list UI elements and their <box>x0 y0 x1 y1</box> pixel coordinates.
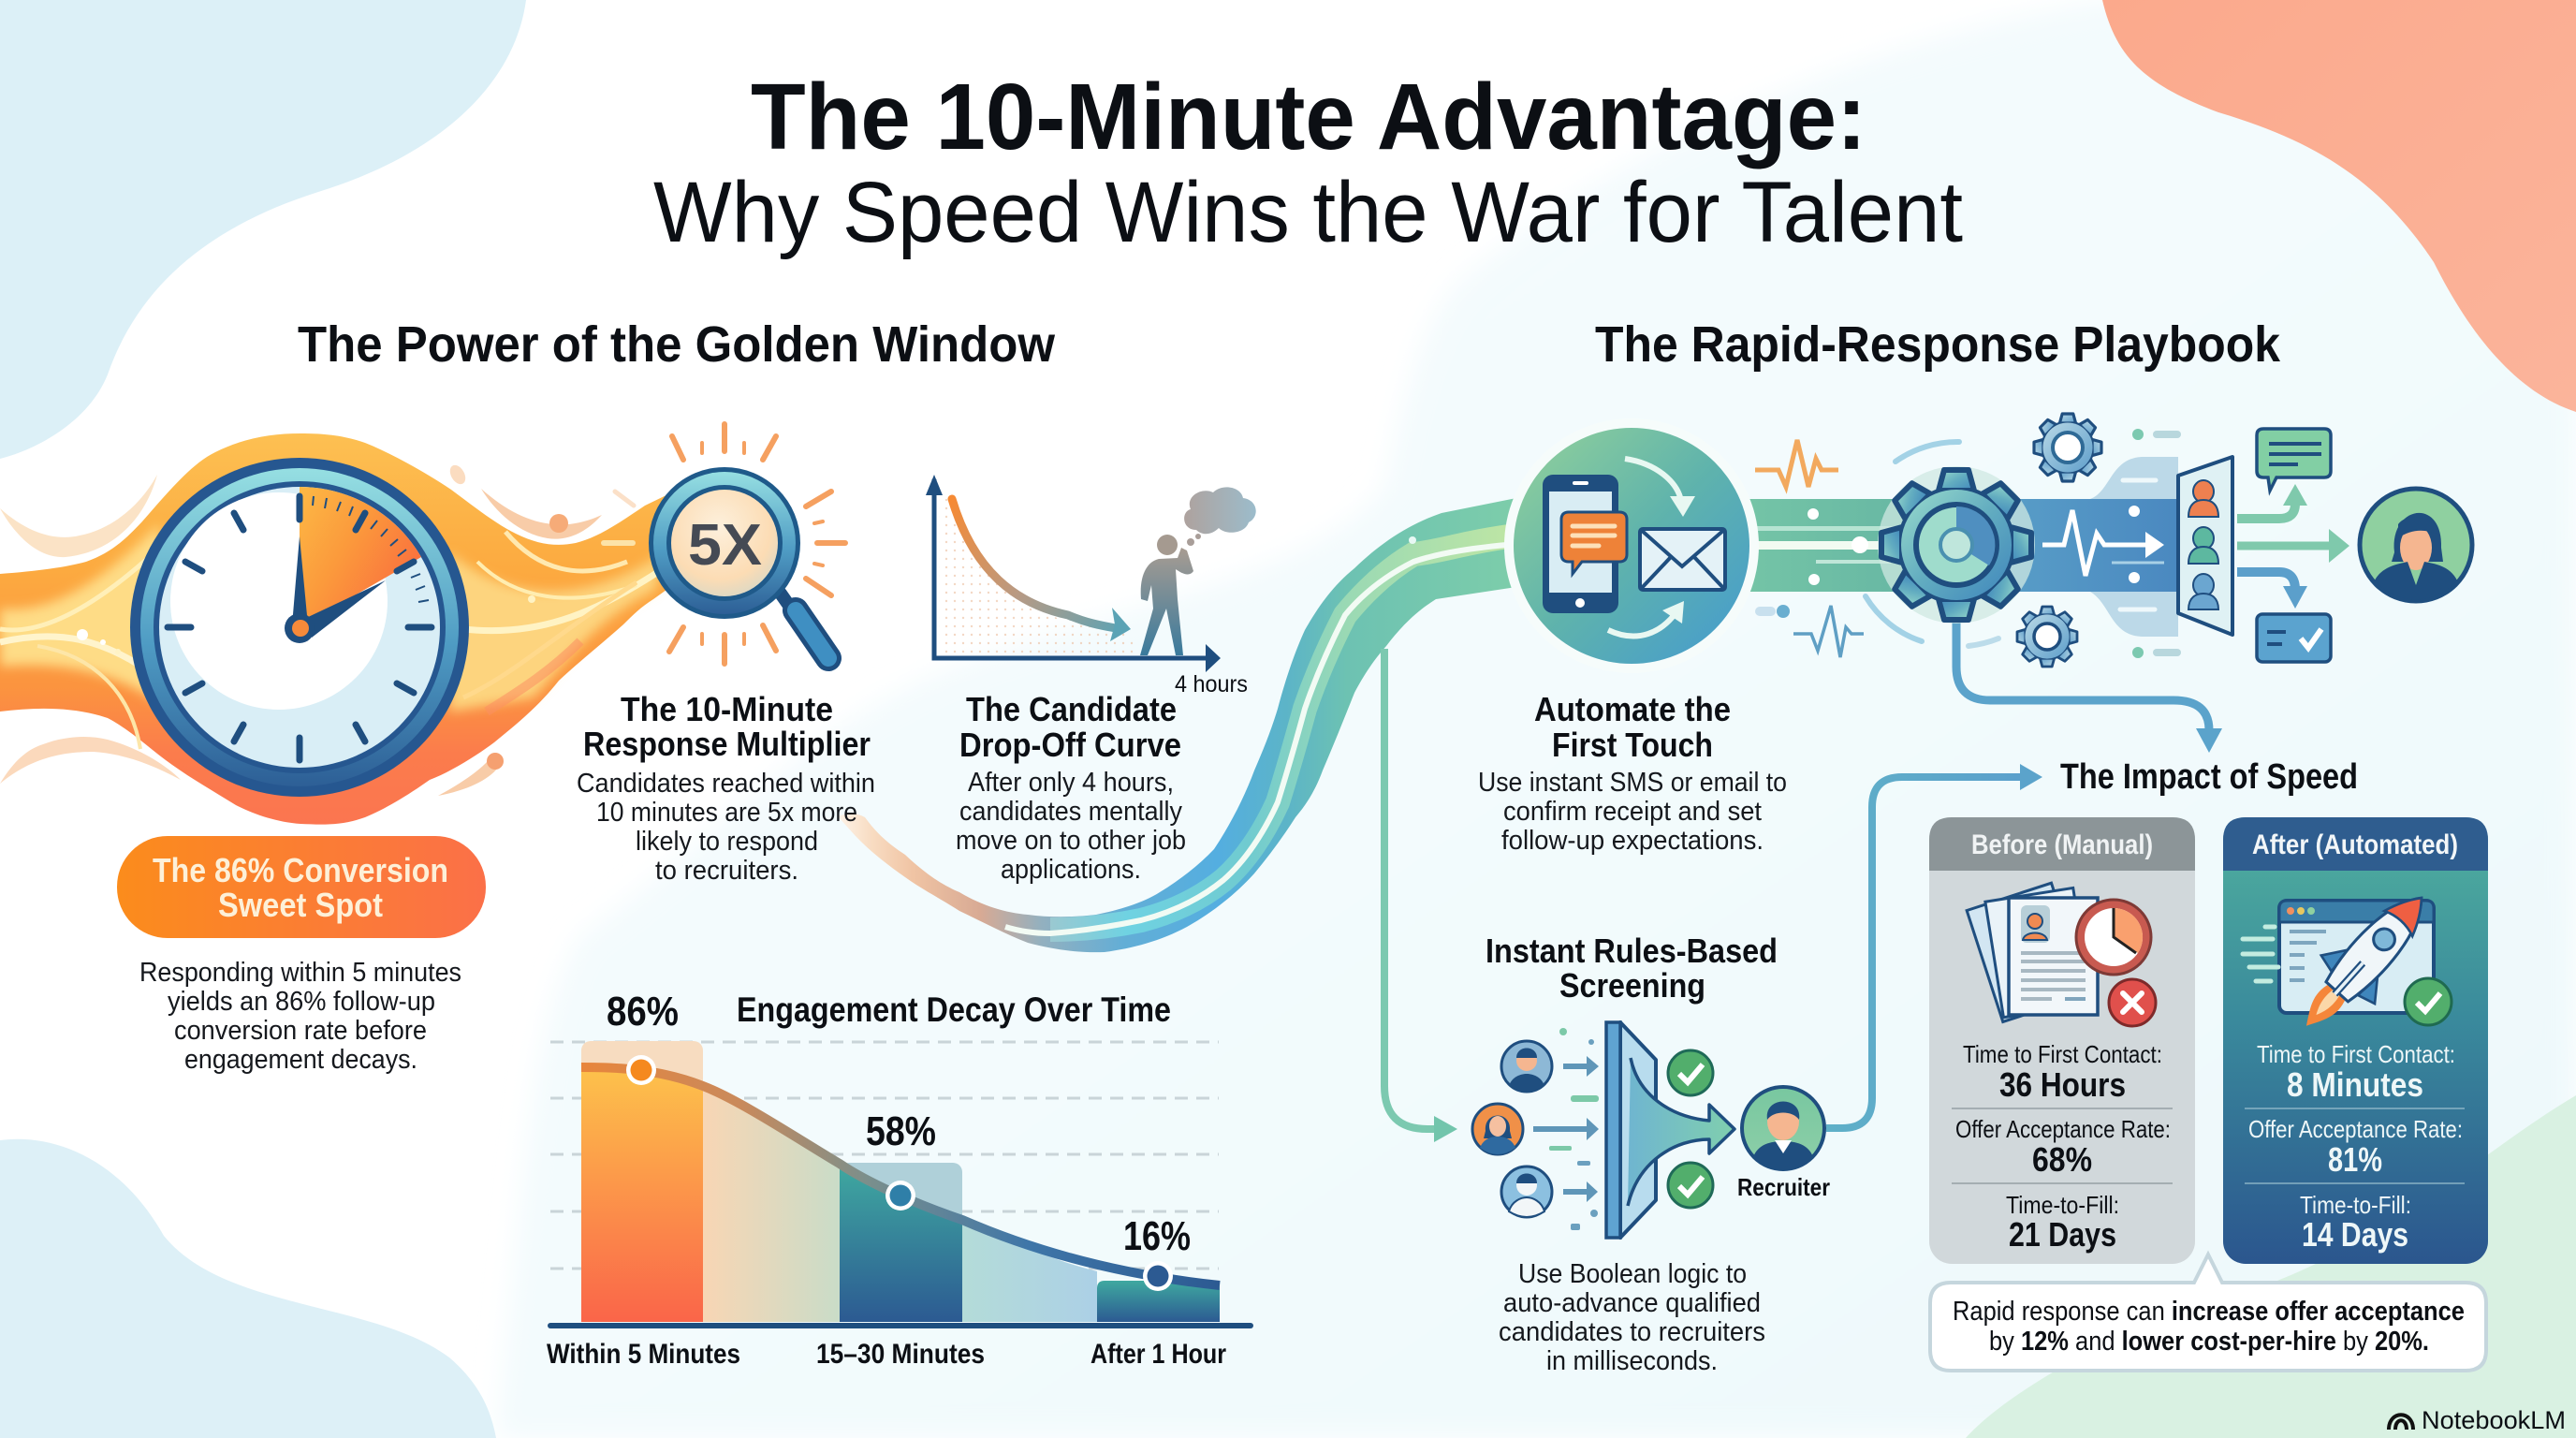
chart: engagement decay: Within 5 Minutes <box>547 1339 740 1370</box>
text: 86% description: conversion rate before <box>174 1016 427 1046</box>
icon: browser with rocket <box>2243 873 2452 1049</box>
pill: 86% conversion sweet spot: The 86% Conversion <box>153 851 448 889</box>
panel: before manual: Time to First Contact: <box>1963 1040 2162 1068</box>
title line 2: Why Speed Wins the War for Talent <box>653 165 1963 260</box>
panel: after automated <box>2223 817 2488 1264</box>
text: candidate drop-off: candidates mentally <box>959 797 1182 827</box>
icon: envelope <box>1640 529 1725 590</box>
icon: recruiter woman avatar <box>2360 489 2472 601</box>
pill: 86% conversion sweet spot: Sweet Spot <box>218 886 383 924</box>
icon: resumes with clock <box>1967 883 2156 1026</box>
icon: small gear bottom <box>2017 607 2077 667</box>
callout: rapid response <box>1930 1255 2486 1371</box>
text: candidate drop-off: After only 4 hours, <box>968 768 1174 798</box>
text: response multiplier <box>577 690 875 886</box>
text: candidate drop-off <box>956 690 1186 885</box>
text: candidate drop-off: applications. <box>1001 855 1141 885</box>
text: screening heading: Screening <box>1559 966 1705 1005</box>
panel: after automated: 81% <box>2328 1140 2382 1179</box>
text: automate first touch: follow-up expectations. <box>1501 826 1764 856</box>
text: screening description: candidates to recruiters <box>1499 1317 1765 1347</box>
icon: candidate panel <box>2178 457 2232 635</box>
avatar: recruiter <box>1742 1087 1824 1170</box>
text: candidate drop-off: move on to other job <box>956 826 1186 856</box>
wisp: upper left <box>0 475 157 557</box>
filter panel <box>1606 1022 1734 1238</box>
panel: before manual: 68% <box>2032 1140 2092 1179</box>
panel: before manual <box>1929 817 2195 1264</box>
icon: main gear <box>1866 442 2035 646</box>
text: 86% description: Responding within 5 minutes <box>139 958 461 988</box>
wisp: lower right <box>438 760 498 796</box>
chart: candidate drop-off curve: 4 hours <box>1175 671 1248 697</box>
icon: pulse orange <box>1755 440 1838 487</box>
text: 86% description: engagement decays. <box>184 1045 417 1075</box>
text: automate first touch: Automate the <box>1534 690 1731 728</box>
bar: within 5 minutes <box>581 1041 703 1322</box>
process band <box>1749 457 2179 637</box>
arrows: into filter <box>1533 1056 1599 1202</box>
heading: golden window: The Power of the Golden Window <box>298 316 1056 373</box>
title <box>653 65 1963 260</box>
panel: after automated: 8 Minutes <box>2287 1065 2423 1104</box>
text: screening heading: Instant Rules-Based <box>1486 932 1778 970</box>
text: candidate drop-off: Drop-Off Curve <box>959 726 1181 764</box>
wisp: upper right <box>481 489 602 539</box>
logo: NotebookLM: NotebookLM <box>2422 1406 2566 1434</box>
panel: after automated: Offer Acceptance Rate: <box>2248 1115 2463 1143</box>
arrow: down to impact of speed <box>1956 618 2222 753</box>
text: response multiplier: 10 minutes are 5x more <box>596 798 857 828</box>
arrow: teal path to screening <box>1384 649 1457 1142</box>
text: response multiplier: Candidates reached within <box>577 769 875 799</box>
arrows: to bubble, avatar and card <box>2237 484 2349 609</box>
arrow: recruiter to impact <box>1826 764 2042 1128</box>
person orange <box>2188 480 2218 517</box>
pill: 86% conversion sweet spot <box>117 836 486 938</box>
chart: engagement decay <box>547 989 1251 1370</box>
icon: person thinking <box>1140 534 1201 655</box>
panel: before manual: 36 Hours <box>1999 1065 2126 1104</box>
bar: 15-30 minutes <box>840 1163 962 1322</box>
text: automate first touch: First Touch <box>1552 726 1713 764</box>
chart: engagement decay: 58% <box>866 1108 936 1154</box>
avatar: candidate 2 <box>1472 1104 1523 1154</box>
panel: after automated: Time to First Contact: <box>2257 1040 2455 1068</box>
icon: magnifying glass 5X <box>649 424 845 664</box>
text: screening heading <box>1486 932 1778 1005</box>
chart: engagement decay: 16% <box>1123 1213 1191 1259</box>
text: screening description <box>1499 1259 1765 1376</box>
person blue <box>2188 574 2218 609</box>
icon: pulse blue <box>1793 606 1864 657</box>
icon: magnifying glass 5X: 5X <box>688 513 762 578</box>
diagram: screening funnel <box>1472 1022 1830 1238</box>
background blob: top right coral <box>2102 0 2576 412</box>
icon: phone <box>1543 475 1618 613</box>
bar: after 1 hour <box>1097 1281 1220 1322</box>
icon: chat bubble <box>1561 512 1627 574</box>
text: candidate drop-off: The Candidate <box>966 690 1177 728</box>
text: screening description: auto-advance qualified <box>1503 1288 1761 1318</box>
background blob: top left <box>0 0 526 459</box>
chart: engagement decay: 86% <box>607 989 679 1034</box>
panel: before manual: 21 Days <box>2009 1215 2116 1254</box>
text: 86% description <box>139 958 461 1075</box>
icon: check 1 <box>1668 1050 1713 1095</box>
text: response multiplier: Response Multiplier <box>583 725 871 763</box>
text: response multiplier: to recruiters. <box>655 856 798 886</box>
title line 1: The 10-Minute Advantage: <box>751 65 1866 169</box>
chart: engagement decay: Engagement Decay Over Time <box>737 990 1171 1029</box>
icon: thought cloud <box>1184 487 1256 534</box>
panel: after automated: Time-to-Fill: <box>2300 1191 2411 1219</box>
text: response multiplier: The 10-Minute <box>621 690 833 728</box>
background blob: bottom right green <box>1966 1095 2576 1438</box>
text: screening description: Use Boolean logic to <box>1518 1259 1747 1289</box>
panel: before manual: Before (Manual) <box>1971 829 2153 860</box>
icon: clock <box>130 458 469 797</box>
text: response multiplier: likely to respond <box>636 827 818 857</box>
icon: automate circle with phone and envelope <box>1504 418 1759 673</box>
panel: after automated: After (Automated) <box>2252 829 2458 860</box>
heading: playbook: The Rapid-Response Playbook <box>1595 316 2281 373</box>
avatar: candidate 3 <box>1501 1167 1552 1217</box>
avatar: candidate 1 <box>1501 1041 1552 1092</box>
chart: candidate drop-off curve <box>926 475 1256 697</box>
chart: engagement decay: After 1 Hour <box>1090 1339 1226 1370</box>
icon: check card <box>2257 614 2331 662</box>
icon: message bubble <box>2257 429 2331 491</box>
icon: small gear top <box>2034 414 2101 481</box>
connecting ribbon <box>838 498 1516 952</box>
heading: impact of speed: The Impact of Speed <box>2060 757 2358 797</box>
panel: before manual: Offer Acceptance Rate: <box>1955 1115 2171 1143</box>
callout: rapid response: by 12% and lower cost-per-hire by 20%. <box>1989 1327 2429 1357</box>
decoration: dots near pulse <box>1755 429 2181 658</box>
text: 86% description: yields an 86% follow-up <box>168 987 435 1017</box>
rocket <box>2279 873 2448 1049</box>
text: automate first touch: Use instant SMS or email to <box>1478 768 1787 798</box>
wisp: lower left <box>0 737 181 784</box>
text: automate first touch <box>1478 690 1787 856</box>
panel: before manual: Time-to-Fill: <box>2006 1191 2119 1219</box>
text: screening description: in milliseconds. <box>1546 1346 1718 1376</box>
diagram: screening funnel: Recruiter <box>1737 1173 1830 1201</box>
panel: after automated: 14 Days <box>2302 1215 2408 1254</box>
person teal <box>2188 527 2218 564</box>
flame stream <box>0 433 693 825</box>
chart: engagement decay: 15–30 Minutes <box>816 1339 985 1370</box>
callout: rapid response: Rapid response can increase offer acceptance <box>1953 1297 2465 1327</box>
text: automate first touch: confirm receipt and set <box>1503 797 1762 827</box>
icon: check 2 <box>1668 1163 1713 1208</box>
background blob: bottom left <box>0 1139 496 1438</box>
